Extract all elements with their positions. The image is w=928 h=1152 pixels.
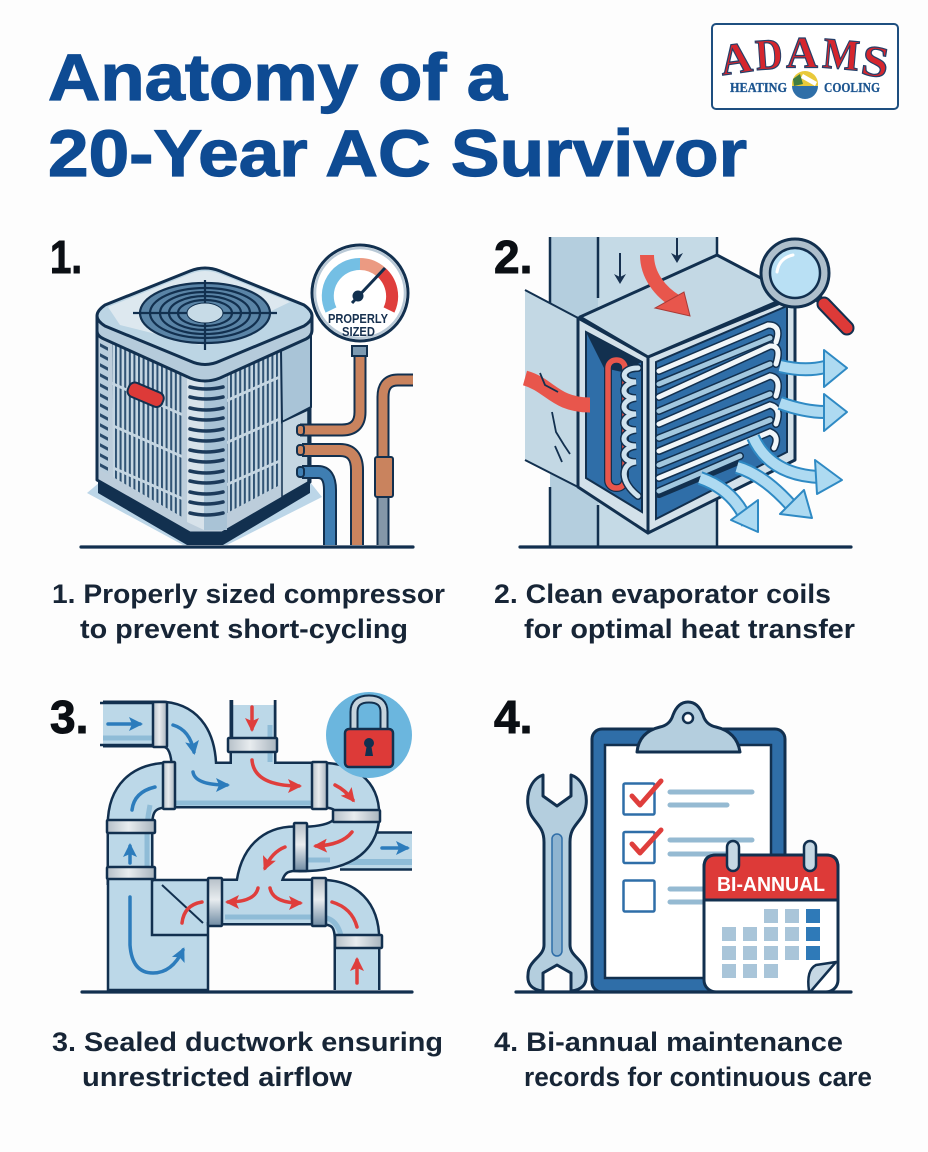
caption 3: unrestricted airflow [82,1062,353,1092]
padlock badge [326,692,412,778]
red badge [126,381,166,409]
calendar [704,841,838,992]
right coil tubes [659,325,778,494]
cabinet [578,255,795,533]
caption 4: 4. Bi-annual maintenance [494,1027,843,1057]
calendar days [722,909,799,978]
calendar heading: BI-ANNUAL [717,874,825,896]
caption 4 [494,1027,872,1092]
logo: Adams Heating & Cooling: S [858,36,892,88]
logo: Adams Heating & Cooling: A [786,28,818,77]
caption 2: 2. Clean evaporator coils [494,579,831,609]
panel: maintenance records illustration [516,702,851,992]
damage cracks [540,373,570,462]
right grille [227,350,280,513]
page curl [808,962,836,991]
title [48,40,747,190]
duct runs [100,700,357,990]
title: Anatomy of a [48,40,508,114]
logo: Adams Heating & Cooling: COOLING [824,81,880,96]
left edge louvres [100,340,108,474]
checklist lines [670,792,752,902]
calendar rings [727,841,816,871]
caption 1: 1. Properly sized compressor [52,579,446,609]
caption 3 [52,1027,443,1092]
caption 4: records for continuous care [524,1062,872,1092]
exit duct [340,832,412,870]
ground line [516,990,851,994]
duct box outlines and damper [108,880,208,990]
logo: Adams Heating & Cooling: HEATING [730,81,787,96]
ground shadow [87,482,322,545]
panel: sealed ductwork illustration [82,692,412,992]
red airflow arrows [182,707,357,983]
left coil loops [624,368,638,496]
clipboard [592,702,785,992]
blue outflow arrows [700,350,847,532]
logo: Adams Heating & Cooling: M [821,28,862,80]
logo: Adams Heating & Cooling [712,24,898,109]
wrench [528,775,586,991]
number 1: 1. [50,231,82,283]
number 3: 3. [50,691,88,743]
caption 3: 3. Sealed ductwork ensuring [52,1027,443,1057]
corner louvres [190,387,223,515]
pressure gauge: properly sized: PROPERLY [328,311,388,326]
ground line [82,990,412,994]
checklist boxes [624,784,654,912]
logo: Adams Heating & Cooling: D [754,29,784,80]
pipe collars [107,702,382,948]
side duct panel [525,290,578,487]
blue airflow arrows [108,724,407,973]
panel: evaporator coil illustration [520,237,851,547]
service panel [281,333,311,422]
red tube on left coil [608,360,625,488]
downward air arrows [620,238,677,282]
panel: AC condenser illustration [81,245,413,547]
red air stream entering panel [525,378,590,405]
caption 1 [52,579,446,644]
logo: Adams Heating & Cooling: A [717,32,755,85]
pressure gauge: properly sized: SIZED [342,324,375,339]
lid [97,317,312,381]
ground line [520,545,851,549]
magnifying glass [761,239,847,328]
ground line [81,545,413,549]
check marks [632,781,661,853]
vertical duct [550,237,717,547]
fan grille [133,280,277,350]
caption 1: to prevent short-cycling [80,614,408,644]
copper pipes [300,355,413,545]
pressure gauge: properly sized [312,245,408,356]
caption 2: for optimal heat transfer [524,614,856,644]
number 4: 4. [494,691,532,743]
number 2: 2. [494,231,532,283]
red air arrow [647,255,677,302]
left grille [112,342,182,517]
duct box [108,880,208,990]
condenser unit [97,268,312,545]
caption 2 [494,579,856,644]
clipboard clip [637,702,740,752]
title: 20-Year AC Survivor [48,116,747,190]
